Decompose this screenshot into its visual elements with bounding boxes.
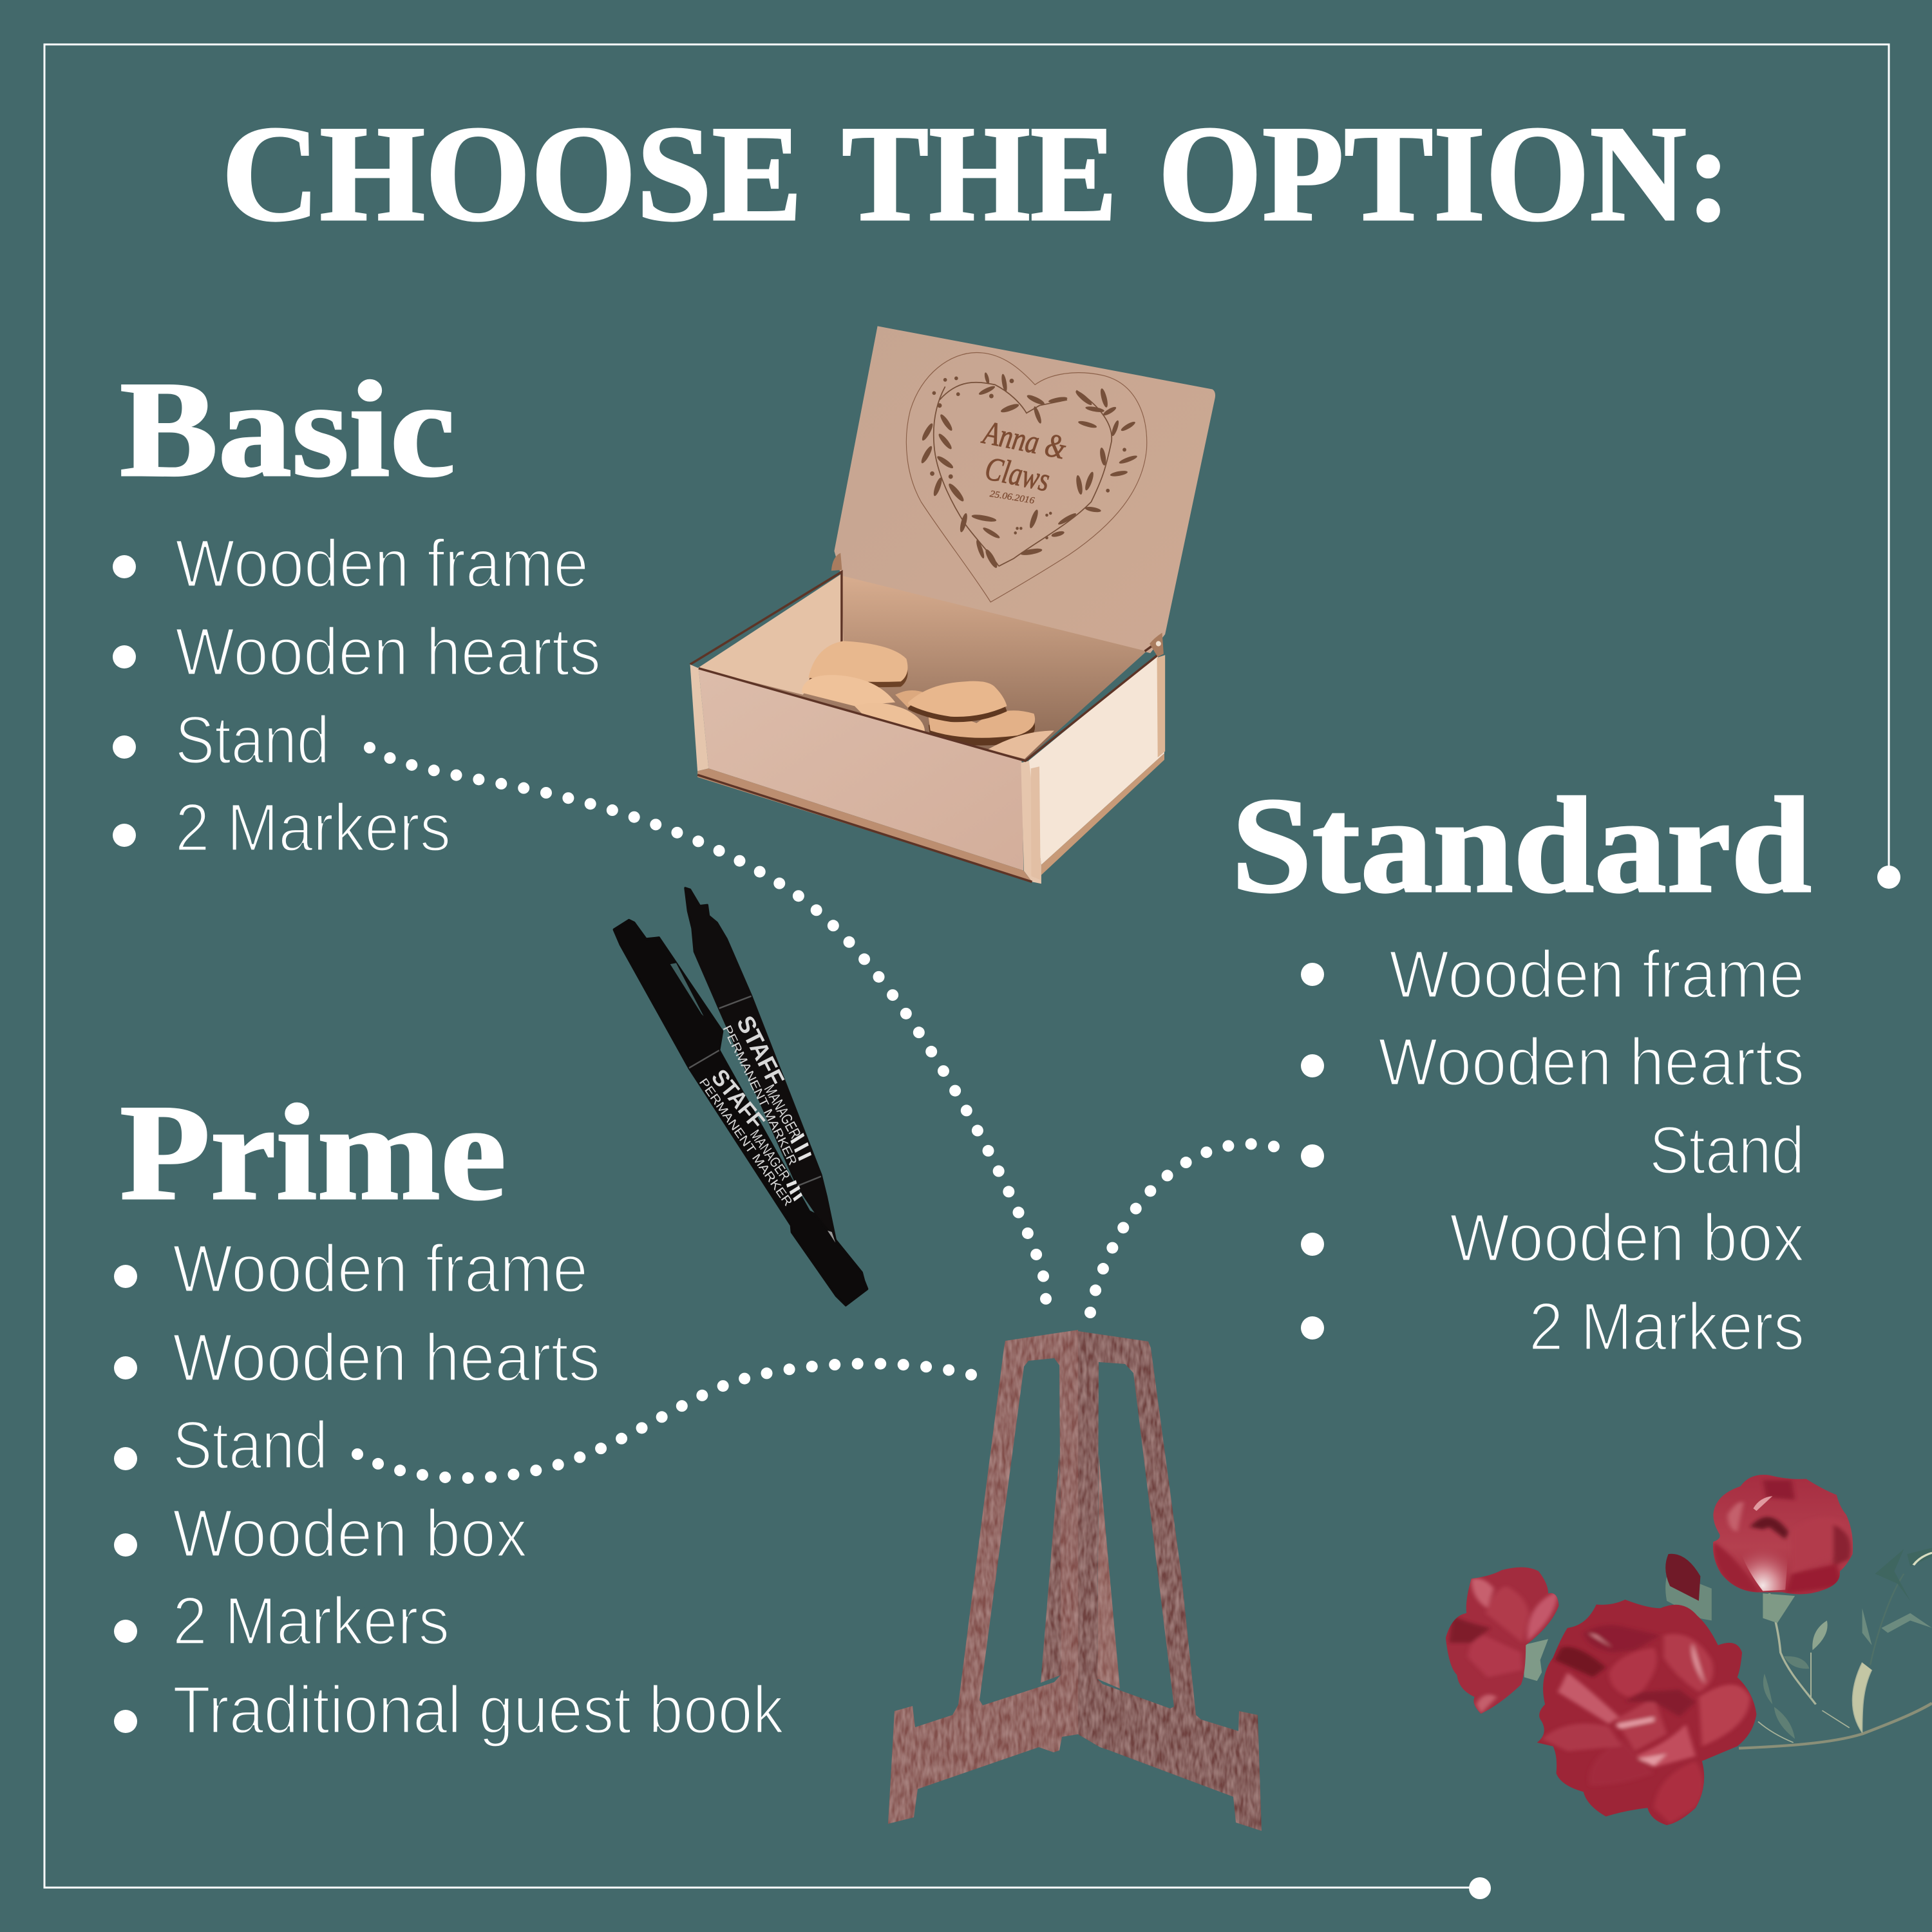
panel: prime option [114,1077,784,1748]
list: prime items: Wooden hearts [173,1320,600,1396]
list: basic items [113,526,601,866]
stems and leaves [1739,1574,1932,1748]
marker labels: PERMANENT MARKER [720,1023,799,1168]
engraved names: 25.06.2016 [989,489,1036,506]
box lid [834,326,1215,653]
engraved names: Claws [982,450,1052,499]
list: prime items [114,1231,784,1748]
marker labels [696,1012,804,1209]
photo: open wooden box with hearts [690,326,1215,884]
box front panel [699,668,1023,871]
title: CHOOSE [222,98,802,250]
left rose sepals [1522,1639,1548,1681]
marker labels: STAFF [731,1012,789,1090]
engraved names: Anna & [979,413,1069,467]
rose bud [1665,1554,1712,1620]
dotted connector: prime stand to stand photo [357,1363,977,1478]
list: standard items [1301,937,1804,1365]
heading: basic: Basic [120,354,455,506]
list: basic items: Wooden frame [175,526,589,601]
list: basic items: 2 Markers [175,790,451,866]
box corner post and edges [1021,761,1041,884]
list: standard items: Wooden hearts [1378,1025,1804,1100]
marker labels: MANAGER [761,1082,804,1141]
title: THE [842,98,1117,250]
large rose [1532,1596,1763,1828]
marker labels: MANAGER [747,1127,793,1184]
list: standard items: Wooden box [1450,1200,1804,1276]
list: standard items: Wooden frame [1389,937,1804,1012]
list: prime items: Stand [173,1408,328,1483]
list: prime items: 2 Markers [173,1584,450,1659]
list: standard items: 2 Markers [1529,1289,1804,1365]
heading: prime: Prime [120,1077,506,1229]
list: prime items: Traditional guest book [173,1672,784,1748]
box interior [697,576,1146,761]
title [222,98,1731,250]
stand left panel [888,1330,1078,1824]
panel: basic option [113,354,601,866]
illustration: red roses [1443,1470,1932,1828]
dotted connector: basic stand to stand photo [370,748,1046,1321]
marker shapes [614,888,867,1305]
marker labels: STAFF [706,1064,770,1134]
box right panel [1028,655,1164,865]
engraved heart outline [906,353,1147,602]
dotted connector: standard stand to stand photo [1090,1144,1282,1312]
list: basic items: Stand [175,703,330,778]
hinges [831,553,1164,657]
marker labels: PERMANENT MARKER [696,1076,795,1209]
left rose [1446,1567,1558,1714]
title: OPTION: [1158,98,1731,250]
engraved names [979,413,1069,506]
top rose [1713,1475,1853,1595]
panel: standard option [1231,770,1812,1365]
stand back legs [1041,1454,1063,1683]
engraved wreath [920,372,1138,569]
photo: two black permanent markers [614,888,867,1305]
list: prime items: Wooden frame [173,1231,588,1307]
list: prime items: Wooden box [173,1496,527,1571]
heading: standard: Standard [1231,770,1812,922]
wooden hearts pile [802,641,1054,759]
list: basic items: Wooden hearts [175,614,601,690]
stand right panel [1078,1331,1262,1831]
list: standard items: Stand [1649,1113,1804,1188]
photo: stained wooden stand [888,1330,1262,1831]
